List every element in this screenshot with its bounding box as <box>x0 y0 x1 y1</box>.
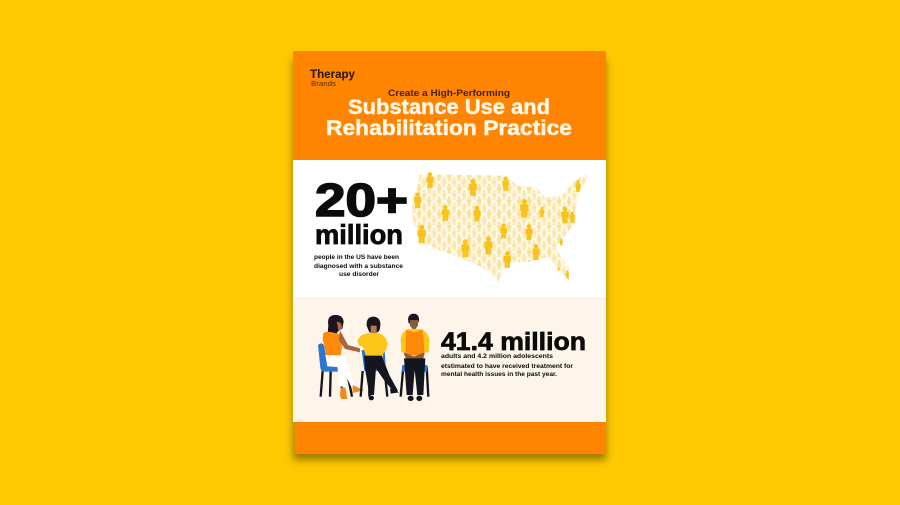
stat: 20+ million: 20+ <box>315 174 408 226</box>
stat: 41.4 million: adults and 4.2 million adolescents <box>441 353 554 360</box>
stat: 41.4 million: etstimated to have received treatment for <box>441 363 574 370</box>
footer band <box>295 422 606 454</box>
panel: header <box>293 51 606 160</box>
logo <box>310 67 355 88</box>
illustration: therapy group <box>318 314 429 401</box>
chart: US map of people <box>411 172 588 282</box>
person left <box>318 315 364 399</box>
stat: 41.4 million: mental health issues in the past year. <box>441 371 557 378</box>
stat: 20+ million <box>314 174 408 278</box>
stat: 20+ million: million <box>315 219 403 250</box>
person right <box>401 314 429 401</box>
person middle <box>357 317 399 400</box>
stat: 20+ million: diagnosed with a substance <box>314 263 403 270</box>
logo: Therapy <box>310 67 355 81</box>
stat: 41.4 million: 41.4 million <box>441 328 586 356</box>
stat: 20+ million: people in the US have been <box>314 254 399 261</box>
stat: 20+ million: use disorder <box>339 271 379 278</box>
title: Substance Use and <box>348 96 550 119</box>
logo: Brands <box>311 81 337 88</box>
stat: 41.4 million <box>441 328 586 378</box>
card shadow <box>293 60 606 460</box>
subtitle: Create a High-Performing <box>388 88 510 99</box>
panel: treatment statistic <box>293 297 606 422</box>
title <box>326 96 572 140</box>
title: Rehabilitation Practice <box>326 117 572 140</box>
panel: US statistic <box>293 160 606 297</box>
